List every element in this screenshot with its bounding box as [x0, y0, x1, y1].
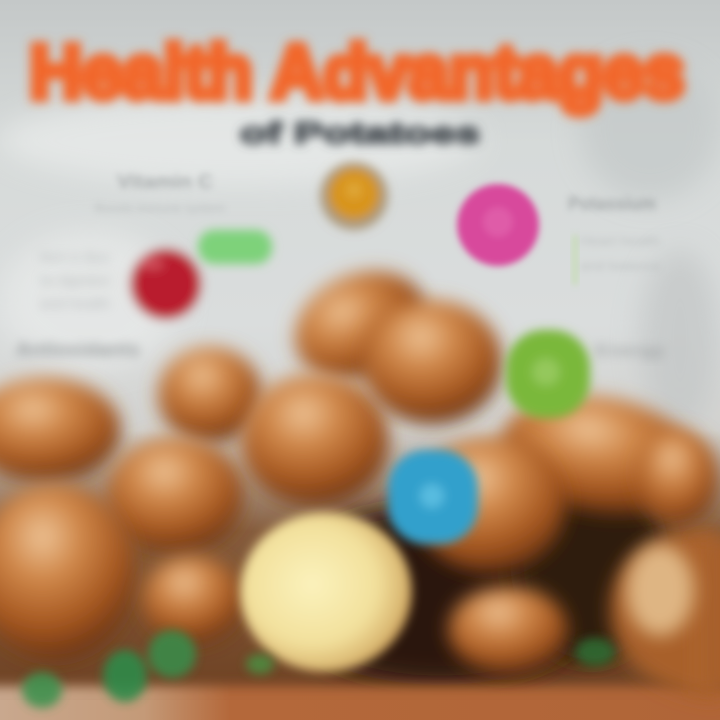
potato pile — [0, 251, 720, 720]
text block: left description: Rich in fibre — [40, 250, 110, 265]
potato: behind blue badge — [414, 437, 566, 573]
dark shadows — [270, 505, 610, 685]
potato: cut half — [240, 512, 412, 672]
potato: centre right — [362, 300, 502, 424]
wood table — [0, 686, 720, 710]
warm backdrop — [0, 430, 720, 720]
text block: lower left label: Antioxidants — [16, 340, 140, 361]
text block: lower right label: Energy — [595, 341, 666, 360]
text block: left description — [40, 250, 110, 311]
potato: mid left — [107, 437, 243, 553]
potato: lower right — [610, 529, 720, 700]
icon: pink badge — [457, 184, 539, 266]
text block: top left label — [95, 172, 225, 215]
text block: top left label: Boosts immune system — [95, 201, 225, 215]
potato: right back — [491, 381, 709, 529]
title: Health Advantages — [30, 30, 684, 115]
potato: back centre left — [158, 347, 262, 443]
text block: right label: Heart health — [580, 234, 660, 248]
text block: left description: for digestion — [40, 273, 110, 288]
text block: right label: Potassium — [568, 194, 656, 215]
icon: orange badge — [320, 162, 388, 230]
text block: top left label: Vitamin C — [117, 172, 213, 193]
icon: red apple badge — [128, 246, 204, 322]
icon: green pill label — [198, 230, 272, 264]
icon: blue badge — [388, 450, 478, 544]
potato: back centre top — [277, 251, 443, 399]
potato: lower left small — [142, 556, 242, 644]
text block: right label: and balance — [580, 259, 660, 273]
potato: large left — [0, 484, 135, 660]
parsley leaves — [22, 630, 615, 708]
text block: left description: and health — [40, 296, 110, 311]
text block: right label — [568, 194, 660, 273]
subtitle: of Potatoes — [240, 117, 480, 150]
potato: far left — [0, 378, 121, 482]
potato: centre — [241, 374, 389, 506]
icon: lime green badge — [506, 330, 590, 418]
potato: lower centre small — [448, 586, 568, 674]
